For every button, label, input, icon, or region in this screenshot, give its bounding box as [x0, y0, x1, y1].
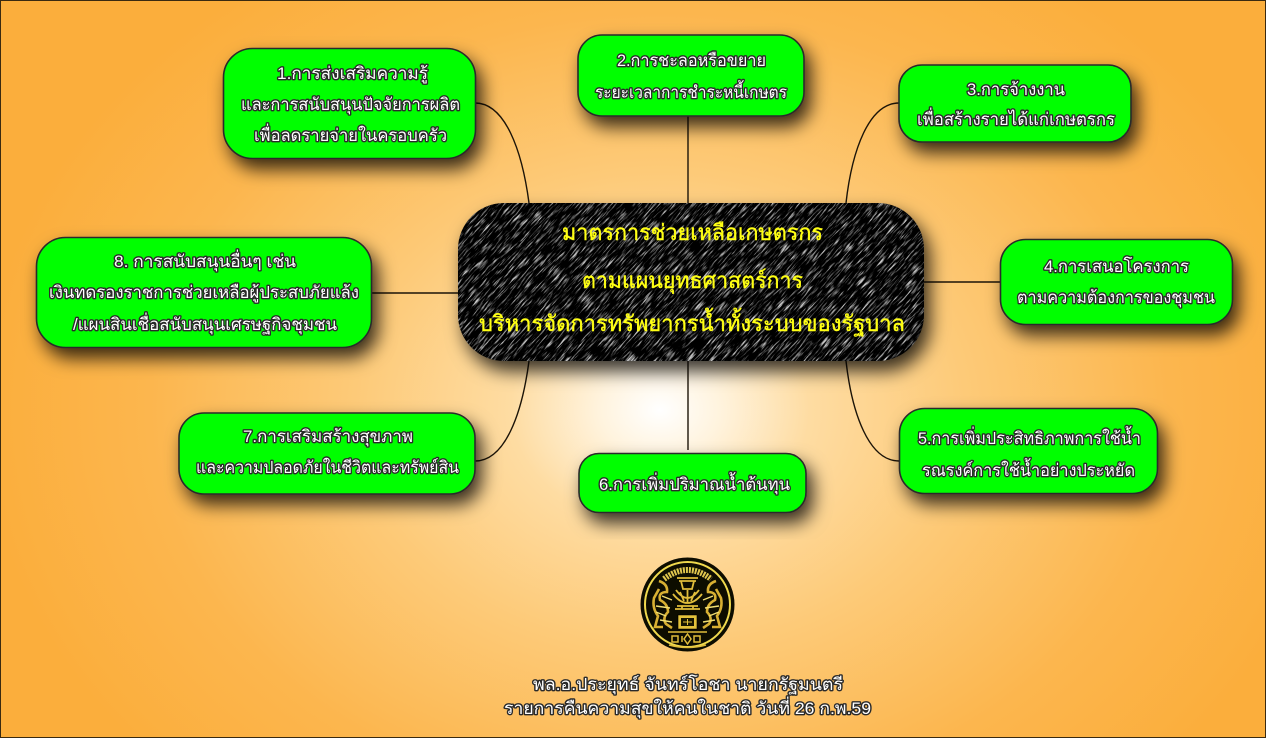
- emblem: left guardian: [654, 581, 672, 628]
- panel: measure 8: [36, 238, 372, 348]
- connector lines: [372, 103, 1000, 461]
- panel: measure 4: ตามความต้องการของชุมชน: [1017, 288, 1215, 308]
- central heading: [479, 220, 905, 337]
- footer caption: [504, 674, 871, 719]
- panel: measure 3: 3.การจ้างงาน: [967, 80, 1065, 99]
- panel: central measures: [449, 198, 945, 386]
- emblem: central vase: [673, 578, 702, 609]
- panel: measure 2: ระยะเวลาการชำระหนี้เกษตร: [595, 80, 787, 102]
- emblem: pedestal: [678, 615, 697, 629]
- panel: measure 6: 6.การเพิ่มปริมาณน้ำต้นทุน: [599, 472, 790, 495]
- central heading: บริหารจัดการทรัพยากรน้ำทั้งระบบของรัฐบาล: [479, 308, 905, 337]
- panel: measure 1: เพื่อลดรายจ่ายในครอบครัว: [254, 123, 447, 145]
- panel: measure 4: 4.การเสนอโครงการ: [1044, 256, 1189, 276]
- central heading: มาตรการช่วยเหลือเกษตรกร: [562, 220, 823, 245]
- central heading: ตามแผนยุทธศาสตร์การ: [582, 268, 803, 294]
- chalk texture: [458, 203, 924, 361]
- panel: measure 7: [179, 413, 475, 494]
- panel: measure 5: 5.การเพิ่มประสิทธิภาพการใช้น้ำ: [918, 426, 1141, 448]
- emblem: right guardian: [703, 581, 722, 628]
- panel: measure 8: 8. การสนับสนุนอื่นๆ เช่น: [114, 249, 296, 272]
- panel: measure 1: [224, 48, 476, 158]
- panel: measure 5: รณรงค์การใช้น้ำอย่างประหยัด: [922, 458, 1135, 480]
- panel: measure 8: /แผนสินเชื่อสนับสนุนเศรษฐกิจชุมชน: [73, 312, 337, 335]
- panel: measure 2: [578, 35, 804, 116]
- emblem: base ribbon: [668, 632, 707, 648]
- panel: measure 3: เพื่อสร้างรายได้แก่เกษตรกร: [917, 107, 1115, 129]
- icon: government emblem: [640, 558, 734, 652]
- panel: measure 1: 1.การส่งเสริมความรู้: [277, 64, 428, 84]
- footer caption: รายการคืนความสุขให้คนในชาติ วันที่ 26 ก.พ.59: [504, 696, 871, 719]
- panel: measure 1: และการสนับสนุนปัจจัยการผลิต: [241, 95, 460, 115]
- panel: measure 6: [579, 454, 806, 512]
- panel: measure 3: [899, 65, 1131, 142]
- footer caption: พล.อ.ประยุทธ์ จันทร์โอชา นายกรัฐมนตรี: [533, 674, 843, 695]
- panel: measure 5: [900, 408, 1158, 494]
- panel: measure 7: 7.การเสริมสร้างสุขภาพ: [243, 427, 413, 447]
- panel: measure 4: [1000, 240, 1232, 324]
- panel: measure 8: เงินทดรองราชการช่วยเหลือผู้ประสบภัยแล้ง: [49, 283, 359, 303]
- emblem: crown arc: [664, 570, 711, 579]
- panel: measure 7: และความปลอดภัยในชีวิตและทรัพย์สิน: [196, 457, 459, 477]
- panel: measure 2: 2.การชะลอหรือขยาย: [617, 51, 766, 70]
